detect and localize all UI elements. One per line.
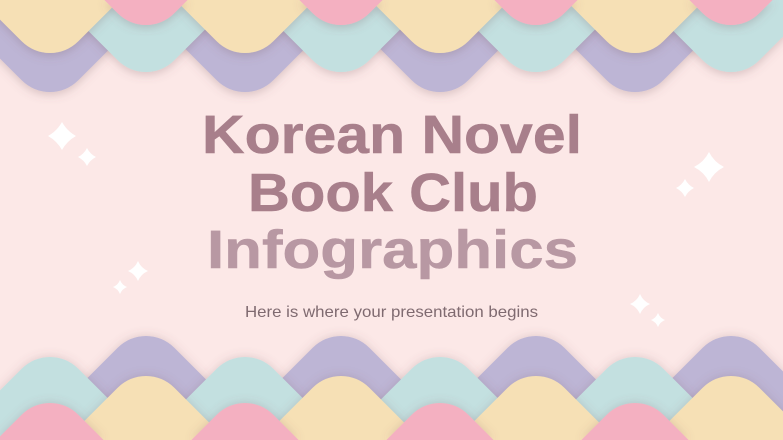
top row: purple scallops — [0, 0, 744, 92]
icon: sparkle — [630, 294, 650, 314]
sparkles left — [48, 122, 148, 294]
bottom row: yellow scallops — [65, 376, 783, 440]
title line: Korean Novel: Korean Novel — [202, 105, 582, 165]
title — [202, 105, 582, 280]
icon: sparkle — [651, 313, 665, 327]
title line: Infographics: Infographics — [207, 220, 578, 280]
top row: pink scallops — [104, 0, 773, 25]
icon: sparkle — [48, 122, 76, 150]
icon: sparkle — [128, 261, 148, 281]
top scallop border — [0, 0, 783, 92]
top row: yellow scallops — [0, 0, 705, 53]
title line: Book Club: Book Club — [248, 163, 538, 223]
bottom row: pink scallops — [0, 403, 689, 440]
bottom row: teal scallops — [0, 357, 735, 440]
top row: teal scallops — [57, 0, 783, 72]
icon: sparkle — [694, 152, 724, 182]
bottom row: purple scallops — [25, 336, 783, 440]
icon: sparkle — [676, 179, 694, 197]
icon: sparkle — [113, 280, 127, 294]
icon: sparkle — [78, 148, 96, 166]
subtitle: Here is where your presentation begins — [245, 304, 538, 321]
sparkles right — [630, 152, 724, 327]
bottom scallop border — [0, 336, 783, 440]
